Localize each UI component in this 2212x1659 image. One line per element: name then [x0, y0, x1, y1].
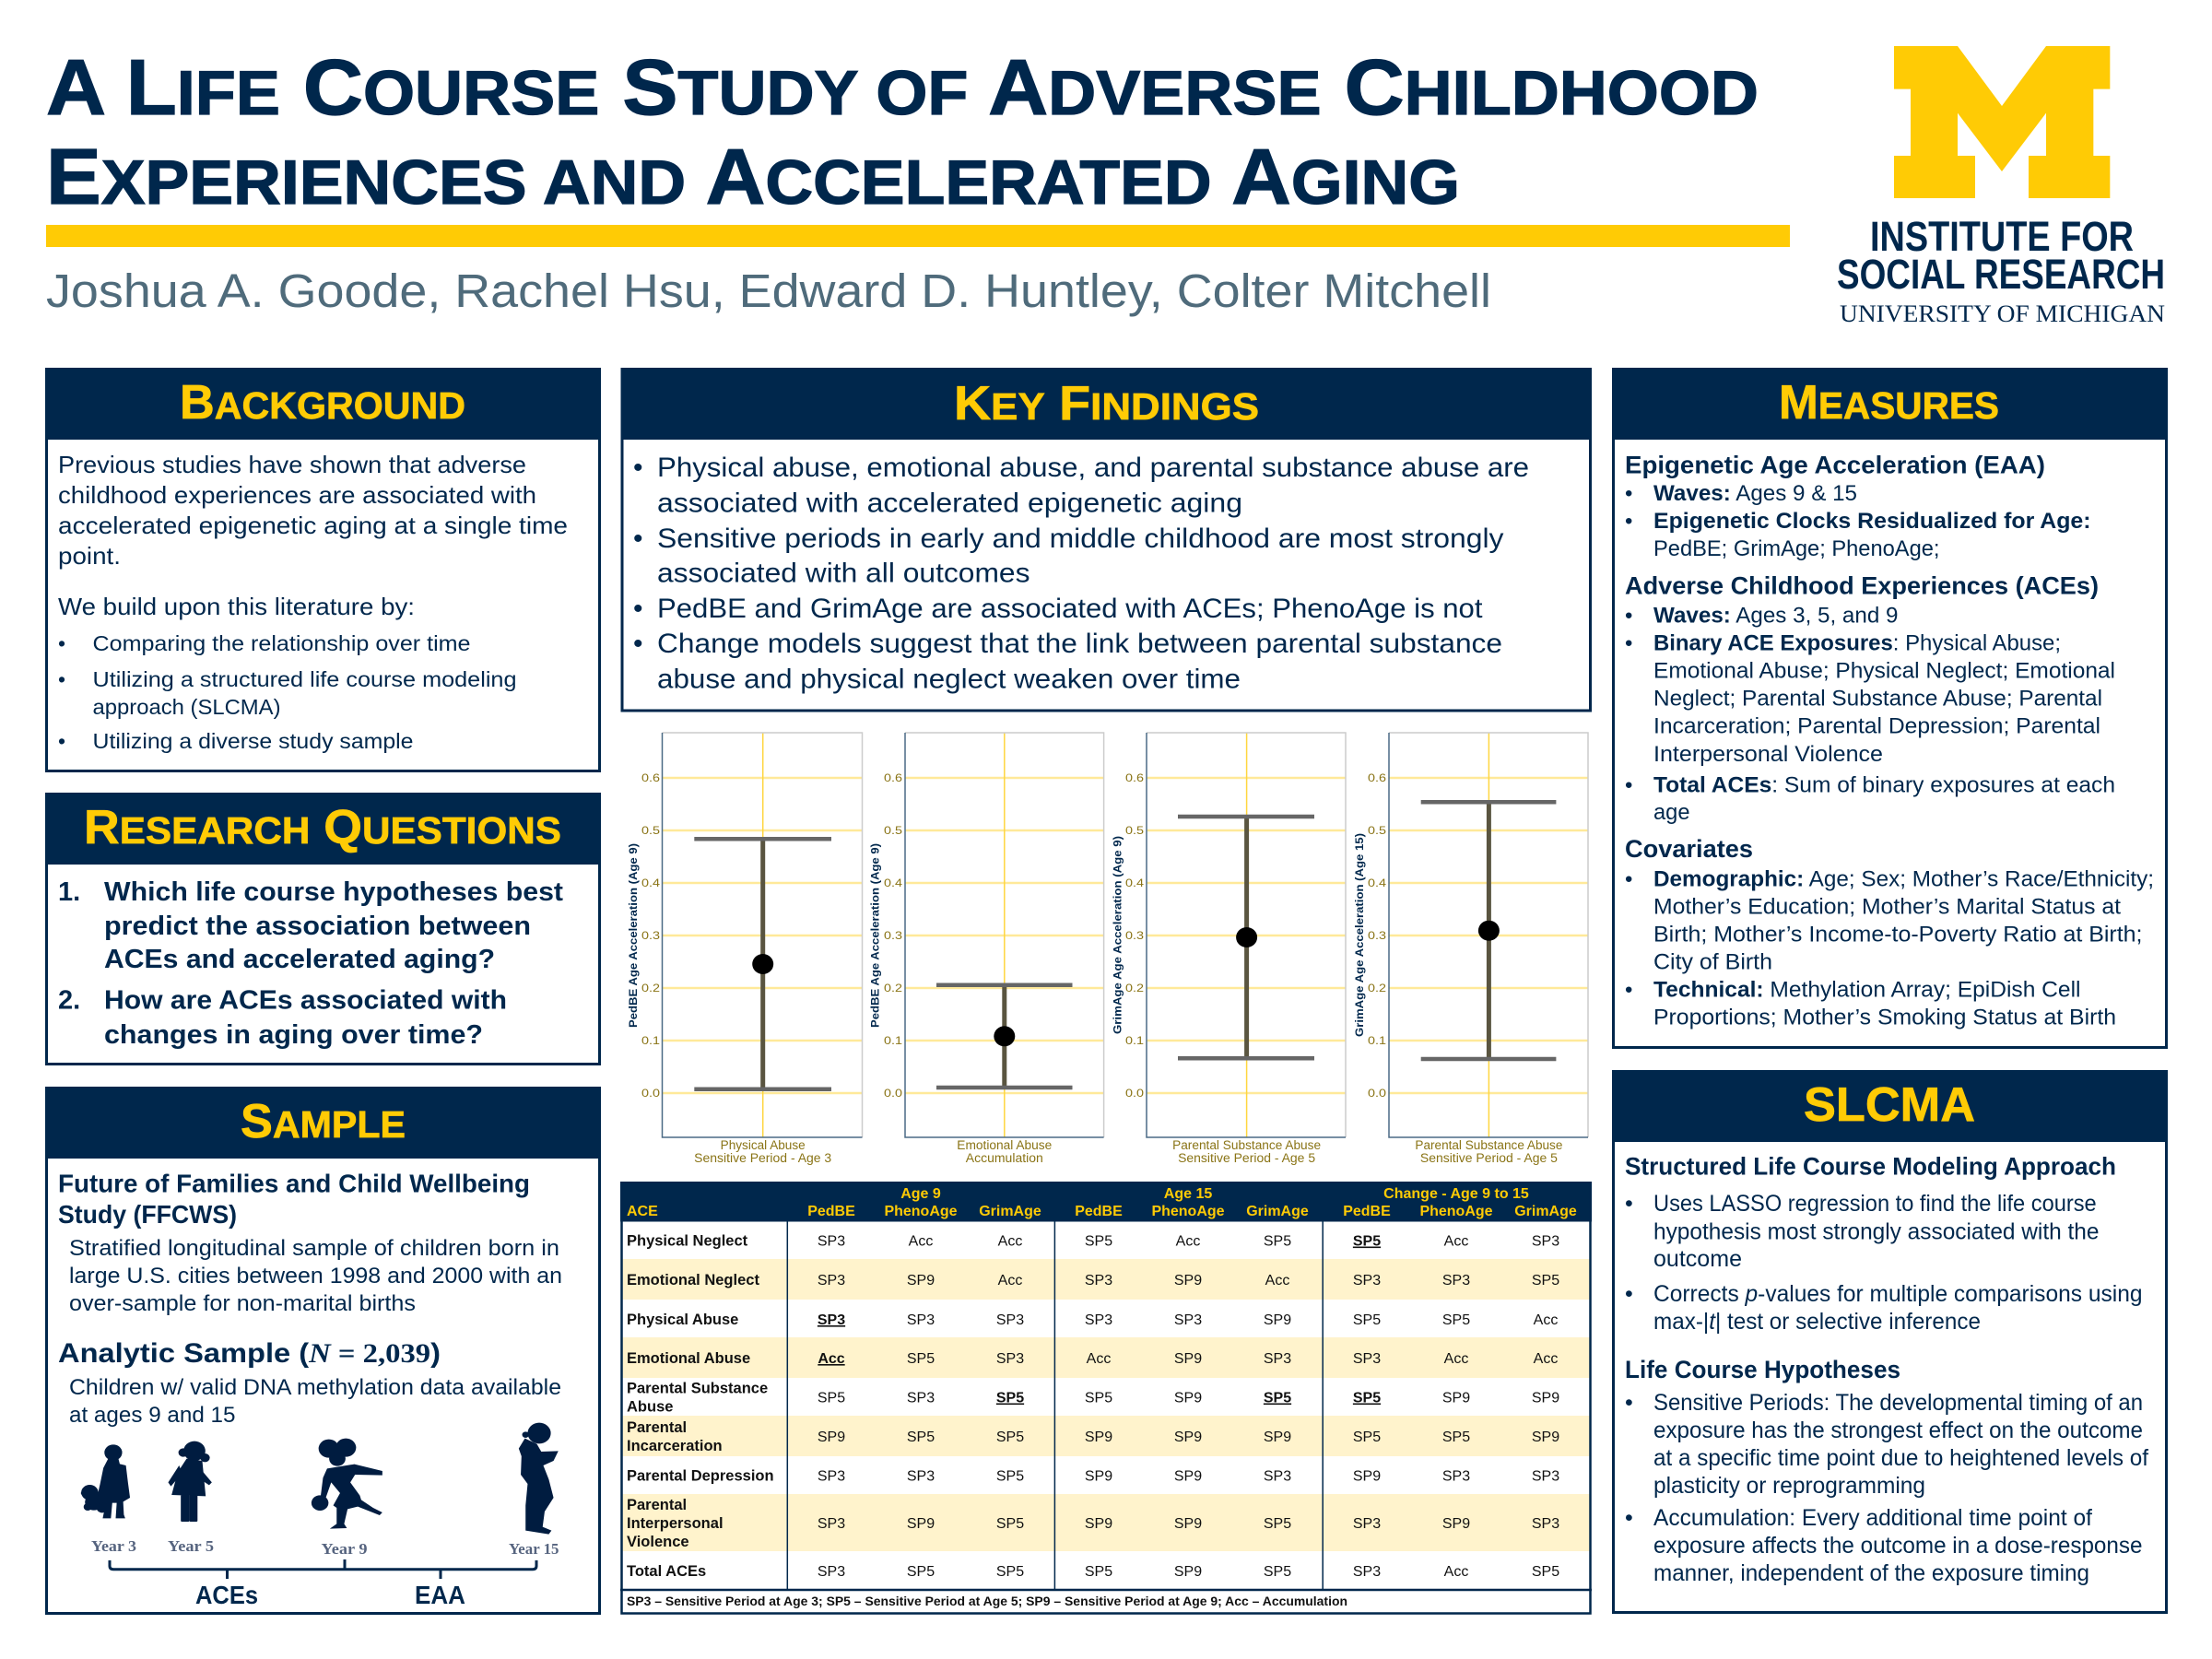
table cells: SP3	[907, 1469, 935, 1484]
section: epigenetic age acceleration	[1625, 452, 2090, 561]
chart: parental substance abuse, GrimAge age 9: 0.0	[1125, 1087, 1144, 1100]
chart: parental substance abuse, GrimAge age 9: 0.1	[1125, 1034, 1144, 1047]
chart: parental substance abuse, GrimAge age 15	[1355, 733, 1588, 1165]
section: adverse childhood experiences: •	[1625, 630, 1632, 656]
chart: physical abuse, PedBE age 9: 0.5	[641, 824, 660, 837]
section: structured life course modeling approach: •	[1625, 1281, 1633, 1307]
table cells: Acc	[998, 1273, 1022, 1288]
title rule	[46, 225, 1790, 247]
chart: emotional abuse, PedBE age 9: Accumulation	[966, 1151, 1043, 1165]
section: adverse childhood experiences: Interpersonal Violence	[1653, 742, 1883, 767]
chart: parental substance abuse, GrimAge age 15: 0.3	[1368, 929, 1386, 942]
row labels: Parental Substance	[627, 1381, 768, 1397]
table cells: SP3	[818, 1312, 845, 1328]
section: adverse childhood experiences: Adverse Childhood Experiences (ACEs)	[1625, 571, 2099, 599]
table cells: SP5	[907, 1430, 935, 1445]
table cells: SP9	[1174, 1564, 1202, 1580]
table cells: SP5	[1353, 1312, 1381, 1328]
table cells: SP5	[1264, 1390, 1291, 1406]
table cells: SP5	[1085, 1564, 1112, 1580]
row labels: Interpersonal	[627, 1515, 724, 1532]
icon: child age 9 with ball	[312, 1439, 382, 1529]
chart: parental substance abuse, GrimAge age 9: 0.6	[1125, 771, 1144, 784]
text block: background intro	[58, 451, 568, 620]
table cells: SP5	[1532, 1564, 1559, 1580]
bullet list: findings: •	[633, 453, 643, 483]
question list: 2.	[58, 986, 80, 1016]
bullet list: background aims	[58, 631, 516, 753]
row labels: Physical Abuse	[627, 1312, 738, 1328]
chart: physical abuse, PedBE age 9: 0.4	[641, 877, 660, 889]
row labels: Parental	[627, 1497, 687, 1513]
question list: Which life course hypotheses best	[104, 877, 563, 907]
section: adverse childhood experiences: Emotional Abuse; Physical Neglect; Emotional	[1653, 658, 2115, 684]
table cells: Acc	[1534, 1351, 1558, 1367]
table cells: SP3	[1085, 1312, 1112, 1328]
chart: parental substance abuse, GrimAge age 15: Parental Substance Abuse	[1415, 1138, 1562, 1152]
chart: physical abuse, PedBE age 9: 0.3	[641, 929, 660, 942]
table cells: SP9	[1442, 1516, 1470, 1532]
row labels: Emotional Neglect	[627, 1272, 759, 1288]
table cells: SP5	[1264, 1233, 1291, 1250]
heading: research questions: RESEARCH QUESTIONS	[84, 801, 561, 854]
section: covariates: Proportions; Mother’s Smoking Status at Birth	[1653, 1005, 2116, 1030]
section: covariates: Demographic: Age; Sex; Mother’s Race/Ethnicity;	[1653, 866, 2154, 892]
icon: teen age 15 with phone	[519, 1423, 559, 1535]
logo: University of Michigan Institute for Social Research: UNIVERSITY OF MICHIGAN	[1840, 300, 2165, 327]
section: adverse childhood experiences	[1625, 571, 2115, 825]
text block: study description: large U.S. cities between 1998 and 2000 with an	[69, 1264, 562, 1288]
icon: child age 5	[168, 1441, 212, 1522]
section: adverse childhood experiences: Neglect; Parental Substance Abuse; Parental	[1653, 686, 2102, 712]
chart: parental substance abuse, GrimAge age 15: 0.5	[1368, 824, 1386, 837]
table header	[620, 1182, 1592, 1222]
table cells: SP9	[907, 1516, 935, 1532]
panel: background	[45, 368, 601, 771]
chart: parental substance abuse, GrimAge age 15: GrimAge Age Acceleration (Age 15)	[1355, 833, 1366, 1037]
chart: emotional abuse, PedBE age 9: 0.1	[884, 1034, 902, 1047]
bullet list: background aims: •	[58, 729, 65, 753]
table cells: SP5	[907, 1351, 935, 1367]
section: structured life course modeling approach: outcome	[1653, 1246, 1742, 1272]
text block: study description: Future of Families and Child Wellbeing	[58, 1169, 530, 1198]
table cells: Acc	[1265, 1273, 1289, 1288]
chart: physical abuse, PedBE age 9: 0.2	[641, 982, 660, 994]
bullet list: findings: •	[633, 594, 643, 624]
section: adverse childhood experiences: Incarceration; Parental Depression; Parental	[1653, 713, 2100, 739]
section: life course hypotheses: exposure has the strongest effect on the outcome	[1653, 1418, 2143, 1443]
table cells: SP3	[1264, 1469, 1291, 1484]
question list: ACEs and accelerated aging?	[104, 945, 495, 974]
question list	[58, 877, 563, 1050]
table cells: SP5	[1532, 1273, 1559, 1288]
bullet list: findings: PedBE and GrimAge are associated with ACEs; PhenoAge is not	[657, 594, 1483, 624]
icon: child age 3 with teddy	[81, 1444, 130, 1518]
chart: physical abuse, PedBE age 9: Physical Abuse	[721, 1138, 806, 1152]
chart: parental substance abuse, GrimAge age 9: 0.4	[1125, 877, 1144, 889]
table cells: SP5	[1085, 1233, 1112, 1250]
row labels	[627, 1233, 774, 1580]
table cells: Acc	[1534, 1312, 1558, 1328]
chart: parental substance abuse, GrimAge age 15: 0.1	[1368, 1034, 1386, 1047]
chart: parental substance abuse, GrimAge age 9	[1113, 733, 1346, 1165]
row labels: Parental	[627, 1419, 687, 1436]
year labels: Year 15	[509, 1540, 559, 1558]
chart: physical abuse, PedBE age 9: Sensitive Period - Age 3	[694, 1151, 831, 1165]
table cells: SP3	[1353, 1564, 1381, 1580]
section: adverse childhood experiences: Waves: Ages 3, 5, and 9	[1653, 603, 1899, 629]
section: epigenetic age acceleration: Waves: Ages 9 & 15	[1653, 481, 1857, 506]
row labels: Abuse	[627, 1399, 673, 1416]
bullet list: findings: abuse and physical neglect weaken over time	[657, 664, 1241, 695]
table cells: SP5	[907, 1564, 935, 1580]
text block: analytic sample: at ages 9 and 15	[69, 1403, 236, 1428]
bullet list: background aims: •	[58, 631, 65, 655]
chart: physical abuse, PedBE age 9: 0.1	[641, 1034, 660, 1047]
section: covariates: City of Birth	[1653, 949, 1772, 975]
title	[46, 44, 1759, 221]
table cells: SP5	[1353, 1233, 1381, 1250]
text block: study description: over-sample for non-marital births	[69, 1291, 416, 1316]
chart: emotional abuse, PedBE age 9: 0.3	[884, 929, 902, 942]
heading: background: BACKGROUND	[180, 376, 465, 429]
row labels: Incarceration	[627, 1438, 723, 1454]
section: structured life course modeling approach: Uses LASSO regression to find the life course	[1653, 1191, 2097, 1217]
section: life course hypotheses: manner, independent of the exposure timing	[1653, 1560, 2089, 1586]
table cells: SP9	[1532, 1390, 1559, 1406]
row labels: Emotional Abuse	[627, 1350, 750, 1367]
table cells: SP3	[818, 1273, 845, 1288]
chart: parental substance abuse, GrimAge age 9: GrimAge Age Acceleration (Age 9)	[1113, 836, 1124, 1034]
section: life course hypotheses: plasticity or reprogramming	[1653, 1473, 1925, 1499]
table header: PhenoAge	[1151, 1204, 1225, 1219]
table cells: SP5	[1353, 1430, 1381, 1445]
table cells: Acc	[909, 1233, 933, 1250]
bullet list: findings: associated with all outcomes	[657, 559, 1030, 588]
table header: Age 15	[1164, 1186, 1212, 1202]
chart: emotional abuse, PedBE age 9: PedBE Age Acceleration (Age 9)	[870, 843, 881, 1028]
bracket labels: ACEs	[195, 1581, 258, 1609]
chart: emotional abuse, PedBE age 9: 0.5	[884, 824, 902, 837]
heading: sample: SAMPLE	[241, 1095, 406, 1148]
table cells: SP5	[818, 1390, 845, 1406]
chart: parental substance abuse, GrimAge age 9: 0.3	[1125, 929, 1144, 942]
bullet list: findings: •	[633, 524, 643, 554]
table cells: SP9	[1174, 1516, 1202, 1532]
table cells: SP5	[1442, 1312, 1470, 1328]
table cells: SP3	[1174, 1312, 1202, 1328]
table cells: SP9	[1532, 1430, 1559, 1445]
table cells: SP9	[1353, 1469, 1381, 1484]
bullet list: background aims: Utilizing a diverse study sample	[92, 729, 413, 753]
section: structured life course modeling approach	[1625, 1152, 2142, 1335]
section: covariates	[1625, 835, 2154, 1030]
table cells: Acc	[1444, 1564, 1468, 1580]
chart: parental substance abuse, GrimAge age 9: 0.2	[1125, 982, 1144, 994]
section: covariates: •	[1625, 977, 1632, 1003]
table header: PedBE	[1075, 1204, 1123, 1219]
table cells: SP3	[907, 1312, 935, 1328]
table cells: SP9	[907, 1273, 935, 1288]
table cells: SP3	[1532, 1469, 1559, 1484]
section: life course hypotheses: exposure affects the outcome in a dose-response	[1653, 1533, 2142, 1559]
table cells: SP5	[996, 1390, 1024, 1406]
table cells: SP5	[996, 1516, 1024, 1532]
table cells: SP3	[1085, 1273, 1112, 1288]
table footnote: SP3 – Sensitive Period at Age 3; SP5 – Sensitive Period at Age 5; SP9 – Sensitive Period at Age 9; Acc – Accumulation	[627, 1594, 1347, 1608]
bullet list: findings: Change models suggest that the link between parental substance	[657, 629, 1502, 659]
panel: measures	[1612, 368, 2168, 1047]
section: adverse childhood experiences: Total ACEs: Sum of binary exposures at each	[1653, 772, 2115, 798]
table cells: SP3	[1442, 1469, 1470, 1484]
table cells: SP3	[907, 1390, 935, 1406]
section: adverse childhood experiences: •	[1625, 772, 1632, 798]
text block: background intro: We build upon this literature by:	[58, 593, 415, 620]
year labels: Year 3	[91, 1537, 136, 1555]
chart: emotional abuse, PedBE age 9	[870, 733, 1104, 1165]
chart: parental substance abuse, GrimAge age 15: Sensitive Period - Age 5	[1420, 1151, 1558, 1165]
table cells: SP5	[1264, 1516, 1291, 1532]
table header: Change - Age 9 to 15	[1383, 1186, 1529, 1202]
section: life course hypotheses	[1625, 1356, 2148, 1586]
section: epigenetic age acceleration: PedBE; GrimAge; PhenoAge;	[1653, 536, 1939, 561]
text block: background intro: accelerated epigenetic aging at a single time	[58, 512, 568, 539]
table cells: SP5	[996, 1430, 1024, 1445]
bullet list: findings: •	[633, 629, 643, 659]
table cells: SP3	[1353, 1273, 1381, 1288]
section: life course hypotheses: Sensitive Periods: The developmental timing of an	[1653, 1390, 2143, 1416]
table header: PhenoAge	[1419, 1204, 1493, 1219]
bullet list: background aims: Comparing the relationship over time	[92, 631, 470, 655]
text block: analytic sample: Analytic Sample ( N = 2,039 )	[58, 1338, 441, 1369]
table header: ACE	[627, 1204, 658, 1219]
bullet list: background aims: Utilizing a structured life course modeling	[92, 667, 516, 691]
row labels: Physical Neglect	[627, 1233, 748, 1250]
timeline of child silhouettes	[81, 1423, 559, 1609]
section: adverse childhood experiences: age	[1653, 800, 1690, 825]
panel: sample	[45, 1087, 601, 1613]
section: epigenetic age acceleration: Epigenetic Age Acceleration (EAA)	[1625, 452, 2045, 479]
chart: physical abuse, PedBE age 9: 0.6	[641, 771, 660, 784]
table cells: SP3	[818, 1233, 845, 1250]
table cells: SP9	[1085, 1516, 1112, 1532]
table cells: SP9	[1174, 1273, 1202, 1288]
table header: GrimAge	[1514, 1204, 1577, 1219]
section: covariates: Birth; Mother’s Income-to-Poverty Ratio at Birth;	[1653, 922, 2142, 947]
title: EXPERIENCES AND ACCELERATED AGING	[46, 134, 1460, 221]
table cells: SP5	[1264, 1564, 1291, 1580]
table cells: SP3	[1353, 1516, 1381, 1532]
section: covariates: •	[1625, 866, 1632, 892]
question list: changes in aging over time?	[104, 1020, 483, 1050]
table: life course hypotheses by ACE and clock	[620, 1182, 1592, 1615]
section: structured life course modeling approach: Structured Life Course Modeling Approach	[1625, 1152, 2116, 1180]
heading: key findings: KEY FINDINGS	[954, 377, 1259, 430]
table cells: SP5	[996, 1469, 1024, 1484]
chart: physical abuse, PedBE age 9: 0.0	[641, 1087, 660, 1100]
table header: GrimAge	[979, 1204, 1041, 1219]
row labels: Total ACEs	[627, 1563, 706, 1580]
title: A LIFE COURSE STUDY OF ADVERSE CHILDHOOD	[46, 44, 1759, 132]
panel: SLCMA	[1612, 1070, 2168, 1613]
chart: physical abuse, PedBE age 9: PedBE Age Acceleration (Age 9)	[629, 843, 640, 1028]
question list: predict the association between	[104, 912, 531, 941]
table cells: Acc	[998, 1233, 1022, 1250]
text block: analytic sample: Children w/ valid DNA methylation data available	[69, 1375, 561, 1400]
table cells: SP9	[1264, 1312, 1291, 1328]
chart: emotional abuse, PedBE age 9: 0.6	[884, 771, 902, 784]
bracket: ACEs and EAA spans	[110, 1559, 536, 1579]
section: epigenetic age acceleration: Epigenetic Clocks Residualized for Age:	[1653, 509, 2090, 534]
section: structured life course modeling approach: •	[1625, 1191, 1633, 1217]
authors: Joshua A. Goode, Rachel Hsu, Edward D. Huntley, Colter Mitchell	[46, 265, 1491, 317]
row labels: Parental Depression	[627, 1467, 774, 1484]
section: adverse childhood experiences: •	[1625, 603, 1632, 629]
logo: University of Michigan Institute for Social Research	[1837, 46, 2165, 327]
panel: research questions	[45, 793, 601, 1064]
chart: parental substance abuse, GrimAge age 15: 0.0	[1368, 1087, 1386, 1100]
table header: PhenoAge	[884, 1204, 958, 1219]
text block: study description: Stratified longitudinal sample of children born in	[69, 1236, 559, 1261]
text block: background intro: childhood experiences are associated with	[58, 481, 536, 509]
section: structured life course modeling approach: max-|t| test or selective inference	[1653, 1309, 1981, 1335]
question list: How are ACEs associated with	[104, 986, 507, 1016]
table cells: SP9	[1085, 1430, 1112, 1445]
table header: PedBE	[807, 1204, 855, 1219]
chart: parental substance abuse, GrimAge age 15: 0.4	[1368, 877, 1386, 889]
question list: 1.	[58, 877, 80, 907]
year labels: Year 9	[321, 1540, 367, 1558]
text block: background intro: Previous studies have shown that adverse	[58, 451, 526, 478]
bullet list: findings	[633, 453, 1529, 695]
chart: parental substance abuse, GrimAge age 9: Parental Substance Abuse	[1172, 1138, 1321, 1152]
row labels: Violence	[627, 1534, 689, 1550]
table cells: SP9	[1174, 1430, 1202, 1445]
chart: emotional abuse, PedBE age 9: 0.2	[884, 982, 902, 994]
table cells	[818, 1233, 1559, 1580]
chart: emotional abuse, PedBE age 9: 0.4	[884, 877, 902, 889]
chart: emotional abuse, PedBE age 9: Emotional Abuse	[957, 1138, 1052, 1152]
table cells: SP5	[996, 1564, 1024, 1580]
table cells: SP3	[1264, 1351, 1291, 1367]
table cells: SP5	[1442, 1430, 1470, 1445]
table cells: SP5	[1353, 1390, 1381, 1406]
chart: emotional abuse, PedBE age 9: 0.0	[884, 1087, 902, 1100]
table cells: SP3	[1353, 1351, 1381, 1367]
chart: physical abuse, PedBE age 9	[629, 733, 863, 1165]
bullet list: findings: associated with accelerated epigenetic aging	[657, 488, 1242, 518]
table cells: SP3	[1532, 1516, 1559, 1532]
section: epigenetic age acceleration: •	[1625, 481, 1632, 506]
table header: Age 9	[900, 1186, 941, 1202]
table cells: Acc	[1087, 1351, 1111, 1367]
bullet list: background aims: approach (SLCMA)	[92, 695, 280, 719]
bracket labels	[195, 1581, 465, 1609]
chart: parental substance abuse, GrimAge age 9: Sensitive Period - Age 5	[1178, 1151, 1315, 1165]
bullet list: background aims: •	[58, 667, 65, 691]
table cells: Acc	[1176, 1233, 1200, 1250]
year labels: Year 5	[168, 1537, 214, 1555]
table header: PedBE	[1343, 1204, 1391, 1219]
text block: background intro: point.	[58, 542, 121, 570]
section: covariates: Mother’s Education; Mother’s Marital Status at	[1653, 894, 2121, 920]
section: structured life course modeling approach: Corrects p-values for multiple comparisons using	[1653, 1281, 2142, 1307]
table cells: SP9	[1174, 1390, 1202, 1406]
table cells: SP9	[1174, 1351, 1202, 1367]
section: epigenetic age acceleration: •	[1625, 509, 1632, 534]
bullet list: findings: Sensitive periods in early and middle childhood are most strongly	[657, 524, 1504, 554]
heading: SLCMA: SLCMA	[1804, 1078, 1975, 1132]
section: life course hypotheses: •	[1625, 1390, 1633, 1416]
section: covariates: Covariates	[1625, 835, 1753, 863]
heading: measures: MEASURES	[1779, 376, 1999, 429]
icon: block M	[1894, 46, 2110, 198]
table cells: SP3	[1442, 1273, 1470, 1288]
section: structured life course modeling approach: hypothesis most strongly associated with the	[1653, 1218, 2100, 1244]
chart: parental substance abuse, GrimAge age 15: 0.6	[1368, 771, 1386, 784]
table cells: SP5	[1085, 1390, 1112, 1406]
table cells: SP9	[818, 1430, 845, 1445]
year labels	[91, 1537, 559, 1558]
section: life course hypotheses: at a specific time point due to heightened levels of	[1653, 1445, 2148, 1471]
table cells: SP3	[996, 1351, 1024, 1367]
text block: analytic sample	[58, 1338, 561, 1428]
table cells: SP9	[1085, 1469, 1112, 1484]
table cells: Acc	[1444, 1233, 1468, 1250]
section: life course hypotheses: Accumulation: Every additional time point of	[1653, 1505, 2092, 1531]
text block: study description	[58, 1169, 562, 1316]
chart: parental substance abuse, GrimAge age 15: 0.2	[1368, 982, 1386, 994]
table cells: SP3	[996, 1312, 1024, 1328]
bullet list: findings: Physical abuse, emotional abuse, and parental substance abuse are	[657, 453, 1529, 483]
table cells: SP3	[818, 1564, 845, 1580]
table cells: Acc	[1444, 1351, 1468, 1367]
logo: University of Michigan Institute for Social Research: INSTITUTE FOR	[1870, 213, 2134, 260]
bracket labels: EAA	[415, 1581, 465, 1609]
section: life course hypotheses: Life Course Hypotheses	[1625, 1356, 1900, 1383]
table cells: SP3	[818, 1516, 845, 1532]
chart: parental substance abuse, GrimAge age 9: 0.5	[1125, 824, 1144, 837]
section: adverse childhood experiences: Binary ACE Exposures: Physical Abuse;	[1653, 630, 2061, 656]
section: life course hypotheses: •	[1625, 1505, 1633, 1531]
table cells: SP3	[818, 1469, 845, 1484]
table cells: SP9	[1264, 1430, 1291, 1445]
panel: key findings	[621, 368, 1592, 711]
table cells: SP9	[1442, 1390, 1470, 1406]
section: covariates: Technical: Methylation Array; EpiDish Cell	[1653, 977, 2081, 1003]
table cells: SP9	[1174, 1469, 1202, 1484]
table header: GrimAge	[1246, 1204, 1309, 1219]
table cells: Acc	[818, 1351, 845, 1367]
text block: study description: Study (FFCWS)	[58, 1200, 237, 1229]
table cells: SP3	[1532, 1233, 1559, 1250]
